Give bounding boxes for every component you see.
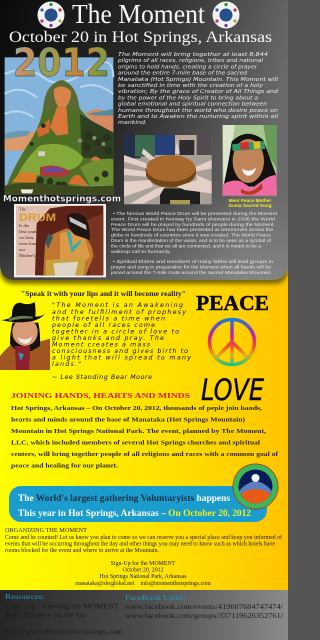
facebook links column: FaceBook Links:: [125, 593, 186, 602]
sign-up text block: Sign-Up for the MOMENT: [111, 560, 176, 567]
caption: Meet Peace Mother: Meet Peace Mother: [229, 198, 271, 203]
resources column: from Home or on the Go: [5, 610, 86, 619]
joining hands paragraph: hearts and minds around the base of Manataka (Hot Springs Mountain): [11, 416, 245, 424]
facebook links column: [125, 593, 284, 620]
photo: hands on drum: [124, 135, 212, 204]
joining hands paragraph: Mountain in Hot Springs National Park. The event, planned by The Moment,: [11, 428, 266, 435]
drum text block: prayer and song in preparation for the Moment when all hands will be: [111, 265, 271, 271]
drum text block: [110, 211, 278, 276]
photo: Peace Mother Gueta: [223, 125, 277, 196]
poster: The Drum: our: [19, 247, 26, 252]
organizing text block: [5, 528, 282, 554]
joining hands paragraph: peace and healing for our planet.: [11, 462, 118, 470]
facebook links column: www.facebook.com/events/419607684747474/: [125, 602, 284, 611]
website label: Momenthotsprings.com: [3, 194, 121, 204]
2012 heading: 2012: [13, 41, 110, 86]
intro text block: Manataka (Hot Springs) Mountain. This Moment will: [118, 77, 279, 83]
joining hands paragraph: Hot Springs, Arkansas – On October 20, 2012, thousands of peple join hands,: [11, 405, 262, 412]
joining hands paragraph: centers, will bring together people of all religions and races with a common goal of: [11, 451, 279, 458]
intro text block: be sanctified in time with the creation of a holy: [118, 83, 264, 89]
sign-up text block: Hot Springs National Park, Arkansas: [100, 574, 187, 580]
quote text: a light that will spread to many: [52, 354, 191, 362]
intro text block: by the power of the Holy Spirit to bring about a: [118, 95, 258, 101]
poster: The Drum: first sound: [19, 229, 39, 234]
caption: Meet Peace Mother: [228, 198, 272, 208]
drum text block: Drum is the manifestation of the vision, and is to be seen as a symbol of: [111, 238, 272, 244]
photo: Lee Standing Bear Moore: [0, 302, 50, 370]
drum text block: event. First created in Norway by Sami shamans in 2006 the World: [111, 216, 275, 222]
resources column: http://www.momenthotsprings.com: [5, 627, 123, 636]
poster: The Drum: DRUM: [19, 212, 56, 224]
poster: The Drum: The: [19, 206, 26, 212]
quote text: consciousness and gives birth to: [52, 347, 188, 355]
intro text block: around the entire 7-mile base of the sacred: [118, 71, 248, 77]
quote text: that foretells a time when: [52, 314, 165, 322]
quote text: together in a circle of love to: [52, 328, 179, 336]
callout: world's largest gathering: [9, 486, 267, 522]
sign-up text block: [75, 560, 211, 587]
organizing text block: Come and be counted! Let us know you plan to come so we can reserve you a special place and keep you informed of: [5, 534, 282, 541]
caption: Meet Peace Mother: Gueta Sacred Song: [228, 203, 272, 208]
organizing text block: events that will be occurring throughout the day and other things you may need to know such as which hotels have: [5, 542, 275, 548]
header panel shadow: [0, 242, 288, 284]
intro text block: pilgrims of all races, religions, tribes and national: [117, 58, 264, 64]
drum text block: • Spiritual Elders and members of many faiths will lead groups in: [113, 259, 273, 265]
quote text: "The Moment is an Awakening: [52, 301, 183, 309]
resources column: [5, 592, 123, 636]
intro text block: Earth and to Awaken the nurturing spirit within all: [118, 114, 279, 120]
quote text: ~ Lee Standing Bear Moore: [52, 373, 152, 381]
quote text: and the fulfillment of prophesy: [52, 308, 186, 316]
drum text block: the circle of life and that we all are connected, and it is meant to be a: [111, 243, 261, 249]
intro text block: origins to hold hands, creating a circle of prayer: [118, 64, 258, 70]
icon: globe emblem: [232, 464, 278, 510]
resources column: Resources:: [5, 592, 45, 601]
quote text: people of all races come: [51, 322, 155, 329]
icon: right medallion: [212, 2, 240, 28]
poster: The Drum: [14, 204, 106, 277]
drum text block: • The famous World Peace Drum will be presented during the Moment: [113, 211, 278, 217]
resources column: Listening / Viewing the MOMENT: [5, 602, 120, 610]
callout: world's largest gathering: The World's largest gathering Voluntaryists happens: [18, 493, 230, 503]
joining hands paragraph: LLC, which included members of several Hot Springs churches and spiritual: [11, 440, 260, 446]
drum text block: The World Peace Drum has been presented at ceremonies across the: [111, 227, 273, 233]
intro text block: humans throughout the world who desire peace on: [118, 108, 278, 114]
LOVE heading: LOVE: [201, 373, 265, 407]
quote text: [51, 301, 191, 381]
icon: left medallion: [38, 2, 64, 28]
poster: The Drum: we hear,: [19, 235, 34, 241]
poster: The Drum: even from: [19, 241, 38, 246]
joining hands heading: JOINING HANDS, HEARTS AND MINDS: [11, 391, 190, 400]
poster: The Drum: Mother's: [19, 253, 35, 258]
PEACE heading: PEACE: [196, 291, 269, 315]
quote heading: "Speak it with your lips and it will become reality": [21, 291, 186, 298]
yellow background panel: [0, 260, 288, 590]
drum text block: Peace Drum will be played by hundreds of people during the Moment.: [111, 222, 275, 228]
drum text block: globe in hundreds of countries since it was created. The World Peace: [111, 233, 271, 239]
subtitle: October 20 in Hot Springs, Arkansas: [9, 29, 272, 46]
intro text block: global emotional and spiritual connection between: [118, 102, 267, 108]
intro text block: mankind.: [118, 120, 147, 126]
quote text: give thanks and pray. The: [52, 334, 164, 342]
quote text: Moment creates a mass: [52, 340, 151, 348]
dark header panel: [0, 0, 288, 280]
drum text block: wakeup call to humanity.: [111, 249, 171, 255]
callout: world's largest gathering: This year in Hot Springs, Arkansas – On October 20, 2012: [18, 508, 251, 518]
poster: The Drum: Is the: [19, 223, 29, 228]
intro text block: vibration; By the grace of Creator of All Things and: [118, 89, 279, 95]
footer panel: [0, 590, 288, 640]
organizing text block: ORGANIZING THE MOMENT: [5, 528, 87, 534]
sign-up text block: October 20, 2012: [122, 568, 164, 574]
facebook links column: www.facebook.com/groups/337119626352761/: [125, 611, 284, 620]
intro text block: [117, 52, 279, 126]
organizing text block: rooms blocked for the event and where to arrive at the Mountain.: [5, 547, 160, 554]
joining hands paragraph: [11, 405, 279, 470]
icon: peace sign: [210, 320, 254, 364]
sign-up text block: manataka@sbcglobal.net info@momenthotsprings.com: [75, 580, 211, 587]
drum text block: joined around the 7-mile route around the sacred Manataka Mountain.: [110, 270, 272, 276]
quote text: lands.": [52, 361, 81, 368]
intro text block: The Moment will bring together at least 8,844: [118, 52, 268, 58]
painting: earth mother: [5, 57, 113, 195]
